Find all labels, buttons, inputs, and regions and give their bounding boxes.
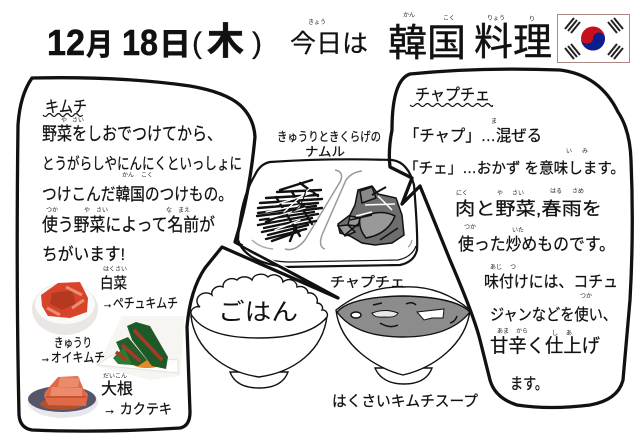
text block: chapchae description: し (552, 330, 558, 337)
label: kkakdugi: だいこん (103, 373, 127, 380)
text block: chapchae description: いた (512, 227, 524, 234)
food: dark vegetable mix (338, 186, 404, 245)
title: today is Korean food: かん (403, 12, 415, 19)
text block: chapchae description: ま (491, 118, 497, 125)
label: cucumber and wood ear namul (277, 130, 381, 159)
illustration: rice bowl (191, 274, 327, 388)
text block: kimchi description: つか (46, 207, 58, 214)
heading: kimchi: キムチ (45, 99, 87, 116)
text block: chapchae description: 肉と野菜,春雨を (455, 199, 602, 219)
title: date: ( (192, 27, 202, 60)
title: date (47, 21, 262, 63)
label: baechu kimchi: 白菜 (100, 275, 127, 292)
text block: chapchae description: 使った炒めものです。 (458, 234, 615, 254)
label: baechu kimchi soup: はくさいキムチスープ (332, 393, 478, 410)
icon: South Korean flag (558, 14, 630, 62)
title: today is Korean food: 料理 (474, 22, 552, 64)
text block: kimchi description (42, 116, 242, 264)
text block: chapchae description: み (582, 148, 588, 155)
text block: kimchi description: や (61, 116, 67, 124)
illustration: kimchi soup bowl (336, 287, 470, 384)
label: baechu kimchi: はく (103, 266, 115, 273)
text block: kimchi description: つけこんだ韓国のつけもの。 (42, 185, 233, 204)
text block: chapchae description: い (566, 148, 572, 155)
panel: nameru tray (238, 159, 417, 267)
title: today is Korean food: こく (443, 15, 455, 22)
text block: kimchi description: かん (122, 172, 134, 179)
text block: chapchae description (404, 118, 625, 393)
title: today is Korean food: 今日は (290, 30, 368, 58)
title: today is Korean food: り (529, 16, 535, 23)
label: cucumber and wood ear namul: ナムル (305, 145, 345, 159)
label: cucumber kimchi (40, 336, 105, 365)
text block: kimchi description: とうがらしやにんにくといっしょに (42, 155, 242, 173)
label: kkakdugi: 大根 (101, 380, 133, 398)
photo: kkakdugi radish kimchi plate (28, 376, 98, 418)
title: date: 月 (86, 29, 113, 62)
text block: kimchi description: な (166, 207, 172, 214)
label: baechu kimchi: さい (115, 266, 127, 273)
title: date: ) (252, 27, 262, 60)
title: today is Korean food: 韓国 (388, 23, 466, 65)
label: rice: ごはん (218, 299, 298, 326)
text block: chapchae description: 甘辛く仕上げ (490, 335, 600, 357)
text block: kimchi description: さい (96, 207, 108, 214)
text block: kimchi description: 野菜をしおでつけてから、 (42, 124, 222, 144)
label: baechu kimchi: →ペチュキムチ (102, 296, 178, 311)
text block: kimchi description: こく (141, 172, 153, 179)
title: date: 日 (159, 27, 191, 62)
photo: cucumber kimchi plate (97, 316, 185, 380)
title: today is Korean food: きょう (308, 19, 326, 26)
title: date: 12 (47, 22, 85, 63)
label: baechu kimchi (100, 266, 178, 311)
text block: kimchi description: 使う野菜によって名前が (42, 215, 215, 235)
text block: kimchi description: まえ (178, 207, 190, 214)
label: cucumber and wood ear namul: きゅうりときくらげの (277, 130, 381, 144)
text block: chapchae description: から (516, 328, 528, 335)
text block: chapchae description: あじ (490, 264, 502, 271)
text block: chapchae description: 「チェ」…おかず を意味します。 (404, 160, 625, 177)
text block: kimchi description: さい (72, 117, 84, 124)
text block: chapchae description: はる (550, 188, 562, 195)
label: kkakdugi: → カクテキ (103, 401, 172, 417)
text block: chapchae description: にく (456, 190, 468, 197)
panel: chapchae speech bubble (389, 69, 632, 407)
text block: chapchae description: 「チャプ」…混ぜる (404, 127, 542, 145)
text block: chapchae description: あま (497, 328, 509, 335)
photo: baechu kimchi bowl (32, 282, 98, 335)
soup surface (337, 296, 470, 337)
label: kkakdugi (101, 373, 172, 417)
label: cucumber kimchi: →オイキムチ (40, 350, 105, 365)
text block: chapchae description: あ (566, 330, 572, 337)
title: today is Korean food (290, 12, 552, 65)
text block: chapchae description: さめ (572, 188, 584, 195)
heading: chapchae: チャプチェ (415, 86, 490, 104)
text block: chapchae description: つ (510, 265, 516, 271)
text block: chapchae description: さい (512, 190, 524, 197)
text block: kimchi description: や (84, 206, 90, 214)
food: cucumber and wood ear namul (257, 180, 322, 241)
text block: chapchae description: つか (464, 224, 476, 231)
title: today is Korean food: りょう (487, 15, 505, 22)
label: chapchae: チャプチェ (330, 274, 405, 290)
text block: chapchae description: つか (580, 293, 592, 300)
text block: chapchae description: や (497, 189, 503, 197)
title: date: 木 (207, 21, 244, 62)
text block: chapchae description: ジャンなどを使い、 (490, 306, 617, 324)
panel: kimchi speech bubble (17, 78, 338, 431)
title: date: 18 (122, 22, 158, 63)
text block: kimchi description: ちがいます! (42, 245, 125, 264)
text block: chapchae description: ます。 (510, 375, 548, 393)
label: cucumber kimchi: きゅうり (54, 336, 92, 350)
text block: chapchae description: 味付けには、コチュ (484, 273, 618, 291)
